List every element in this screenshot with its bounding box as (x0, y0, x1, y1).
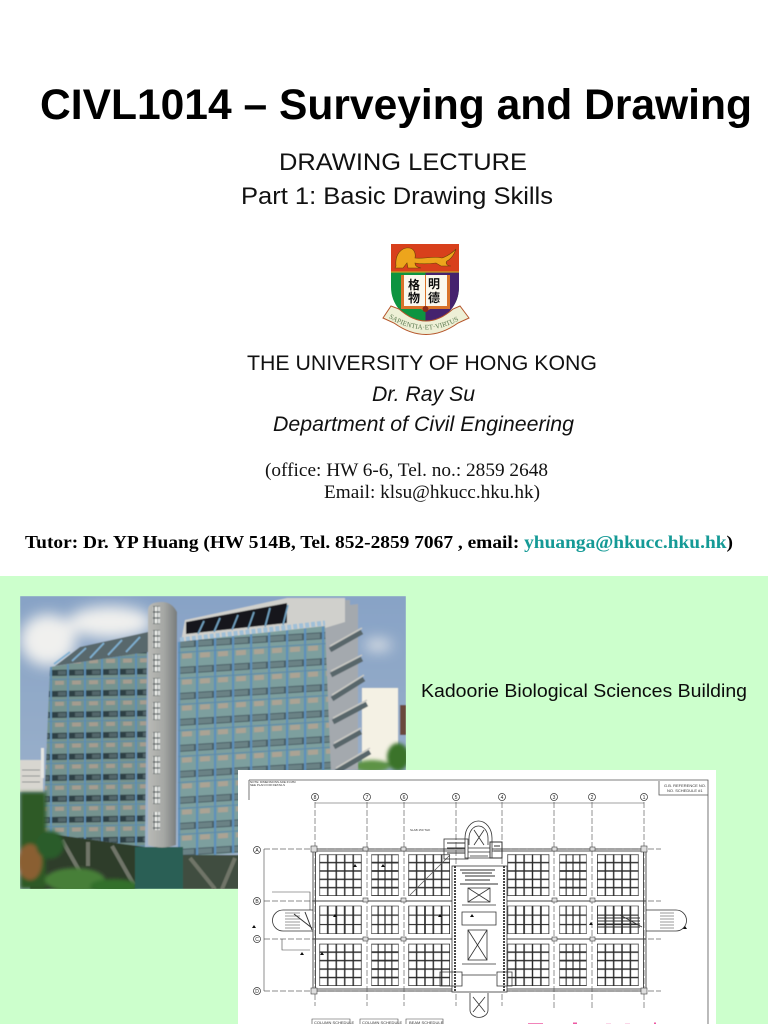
roof plant, right wing (180, 598, 345, 642)
bottom row slab panels (319, 944, 639, 986)
grid labels: 1 (643, 795, 646, 801)
office contact: (office: HW 6-6, Tel. no.: 2859 2648 (265, 460, 548, 481)
notes top left: NOTE: DIMENSIONS ARE IN MM (250, 780, 296, 784)
left stair (272, 910, 313, 931)
white neighbouring building (362, 688, 398, 763)
notes top left (250, 780, 430, 832)
column stubs (311, 846, 647, 994)
notes top left: SLAB 150 THK (410, 828, 430, 832)
schedule boxes (312, 1019, 444, 1024)
background towers (20, 748, 44, 792)
grid labels: 5 (455, 795, 458, 801)
crest book: 格 (408, 276, 420, 293)
department: Department of Civil Engineering (273, 413, 574, 436)
top row slab panels (319, 854, 639, 896)
main beams (313, 849, 646, 991)
grid labels: D (255, 989, 259, 995)
tutor line: Tutor: Dr. YP Huang (HW 514B, Tel. 852-2859 7067 , email: yhuanga@hkucc.hku.hk ) (25, 532, 733, 553)
crest book (401, 275, 450, 312)
grid labels: A (255, 848, 259, 854)
drawing sheet (238, 770, 716, 1024)
sheet frame and title block: G.B. REFERENCE NO. (664, 783, 706, 788)
crest lion (395, 248, 456, 268)
grid labels (255, 795, 646, 995)
subtitle: drawing lecture: DRAWING LECTURE (279, 149, 527, 176)
subtitle: part 1: Part 1: Basic Drawing Skills (241, 183, 553, 210)
email contact: Email: klsu@hkucc.hku.hk) (324, 482, 540, 503)
grid labels: 3 (553, 795, 556, 801)
crest shield (391, 244, 459, 327)
grid column bubbles (254, 794, 648, 994)
grid labels: 2 (591, 795, 594, 801)
crest book: 德 (428, 289, 440, 306)
grid labels: C (255, 937, 259, 943)
dimension lines (264, 803, 644, 991)
sheet frame and title block (249, 780, 708, 1024)
lecturer name: Dr. Ray Su (372, 383, 475, 406)
caption: building name: Kadoorie Biological Sciences Building (421, 680, 747, 701)
diagonal brace (410, 855, 450, 895)
sheet frame and title block: NO. SCHEDULE #1 (667, 788, 703, 793)
grid labels: 6 (403, 795, 406, 801)
floor plan drawing (238, 770, 716, 1024)
side stair block (325, 600, 370, 772)
right wing facade (178, 626, 334, 858)
notes top left: SEE PLAN FOR DETAILS (250, 783, 285, 787)
crest motto scroll: SAPIENTIA·ET·VIRTUS (389, 314, 458, 330)
grid labels: 8 (314, 795, 317, 801)
cut-off magenta annotation (528, 1022, 656, 1024)
university name: THE UNIVERSITY OF HONG KONG (247, 352, 597, 375)
grid labels: 4 (501, 795, 504, 801)
right trees (354, 743, 409, 772)
service tower (148, 602, 177, 848)
pilotis and dark underside (30, 834, 238, 889)
crest book: 物 (408, 289, 420, 306)
panel: green background (0, 576, 768, 1024)
title: CIVL1014 – Surveying and Drawing (40, 81, 752, 129)
central core (440, 821, 512, 1017)
right stair (598, 910, 686, 931)
grid labels: B (255, 899, 259, 905)
crest book: 明 (428, 275, 440, 292)
axis lines (264, 802, 661, 1010)
clouds (20, 606, 392, 666)
roof plant, left wing (54, 632, 148, 666)
middle row slab panels (319, 906, 639, 934)
icon: university crest (382, 244, 470, 335)
section and level markers (252, 864, 687, 955)
green glass base (135, 847, 183, 889)
trees left and foreground (18, 792, 138, 893)
sky (20, 596, 406, 889)
photo: Kadoorie building (18, 596, 409, 893)
grid labels: 7 (366, 795, 369, 801)
left wing facade (43, 652, 147, 847)
